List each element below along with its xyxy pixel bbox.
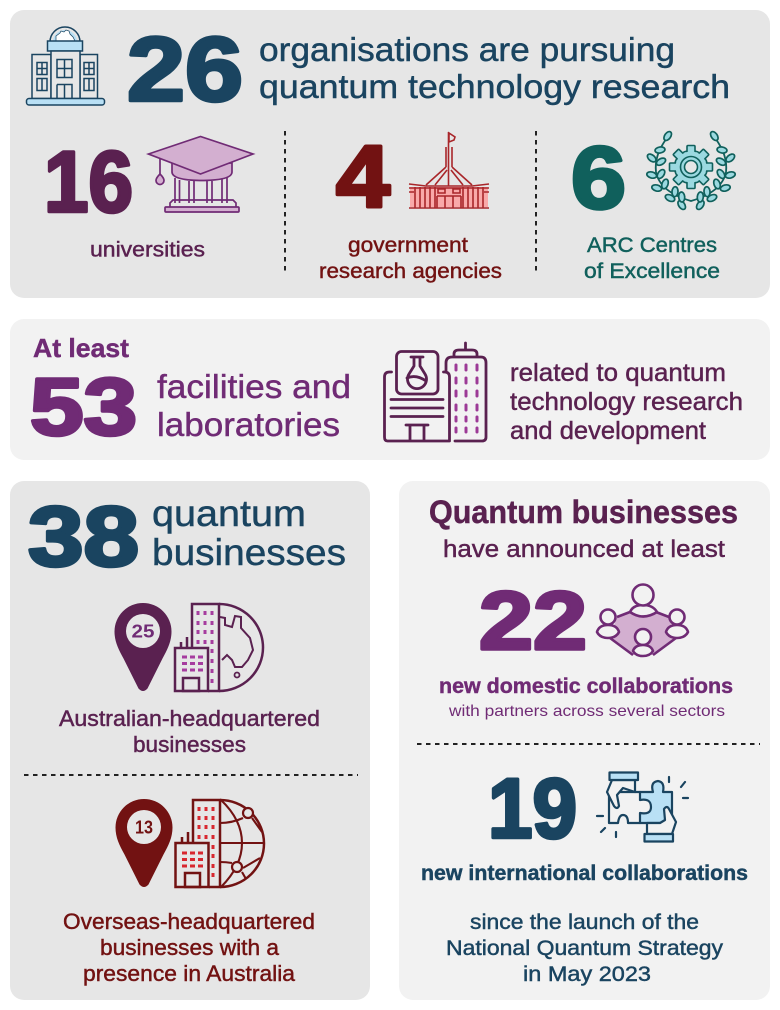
- heading: quantum businesses: quantum: [152, 493, 306, 534]
- text: Overseas-headquartered businesses with a presence in Australia: Overseas-headquartered: [63, 909, 315, 934]
- icon: building with Australia dome: [26, 27, 104, 105]
- text: related to quantum technology research and development: related to quantum: [510, 359, 726, 387]
- label: government research agencies: government: [348, 234, 468, 257]
- icon: buildings and connected globe: [176, 800, 264, 887]
- label: ARC Centres of Excellence: [584, 234, 720, 283]
- text: Australian-headquartered businesses: businesses: [133, 732, 246, 757]
- panel: quantum businesses: [10, 481, 370, 1000]
- panel: organisations: [10, 10, 770, 298]
- icon: map pin 25: 25: [132, 622, 154, 642]
- number: 6: 6: [571, 128, 626, 227]
- text: Overseas-headquartered businesses with a presence in Australia: presence in Australia: [83, 961, 296, 986]
- text: Australian-headquartered businesses: [59, 706, 320, 757]
- icon: people around a table: [597, 584, 688, 656]
- heading: quantum businesses: businesses: [152, 532, 346, 573]
- number: 53: 53: [30, 362, 137, 452]
- icon: map pin 25: [114, 603, 172, 691]
- heading: organisations are pursuing quantum technology research: quantum technology research: [259, 68, 730, 105]
- heading: organisations are pursuing quantum technology research: [259, 31, 730, 105]
- text: related to quantum technology research and development: technology research: [510, 388, 743, 416]
- text: At least: At least: [33, 333, 129, 363]
- text: facilities and laboratories: laboratories: [157, 406, 340, 443]
- icon: Parliament House: [409, 132, 489, 208]
- label: government research agencies: [319, 234, 502, 283]
- text: facilities and laboratories: facilities and: [157, 368, 351, 405]
- text: Australian-headquartered businesses: Australian-headquartered: [59, 706, 320, 731]
- heading: quantum businesses: [152, 493, 346, 573]
- icon: map pin 13: 13: [135, 818, 153, 838]
- icon: gear with laurel wreath: [646, 130, 736, 211]
- label: government research agencies: research agencies: [319, 260, 502, 283]
- label: ARC Centres of Excellence: ARC Centres: [587, 234, 717, 257]
- icon: buildings and Australia globe: [175, 604, 263, 691]
- number: 16: 16: [44, 134, 133, 230]
- icon: laboratory building: [384, 343, 486, 441]
- panel: facilities and laboratories: [10, 319, 770, 460]
- text: since the launch of the National Quantum Strategy in May 2023: National Quantum Strategy: [446, 937, 724, 960]
- number: 22: 22: [479, 574, 587, 667]
- number: 4: 4: [336, 127, 390, 226]
- icon: hands joining puzzle pieces: [597, 772, 688, 842]
- text: related to quantum technology research and development: and development: [510, 417, 706, 445]
- text: new domestic collaborations: new domestic collaborations: [439, 675, 733, 698]
- text: related to quantum technology research and development: [510, 359, 743, 445]
- text: new international collaborations: new international collaborations: [421, 862, 748, 885]
- text: with partners across several sectors: with partners across several sectors: [448, 703, 725, 720]
- text: since the launch of the National Quantum Strategy in May 2023: [446, 911, 724, 986]
- text: Overseas-headquartered businesses with a presence in Australia: [63, 909, 315, 986]
- label: universities: universities: [90, 238, 205, 262]
- text: since the launch of the National Quantum Strategy in May 2023: in May 2023: [523, 963, 651, 986]
- number: 26: 26: [127, 20, 243, 120]
- text: have announced at least: have announced at least: [443, 536, 725, 563]
- heading: Quantum businesses: Quantum businesses: [429, 494, 738, 530]
- panel: collaborations: [399, 481, 770, 1000]
- text: since the launch of the National Quantum Strategy in May 2023: since the launch of the: [470, 911, 699, 934]
- text: facilities and laboratories: [157, 368, 351, 443]
- heading: organisations are pursuing quantum technology research: organisations are pursuing: [259, 31, 675, 68]
- icon: graduation cap on columns: [148, 136, 253, 212]
- number: 38: 38: [28, 490, 139, 584]
- icon: map pin 13: [116, 799, 172, 887]
- label: ARC Centres of Excellence: of Excellence: [584, 260, 720, 283]
- text: Overseas-headquartered businesses with a presence in Australia: businesses with a: [100, 935, 280, 960]
- number: 19: 19: [488, 762, 577, 856]
